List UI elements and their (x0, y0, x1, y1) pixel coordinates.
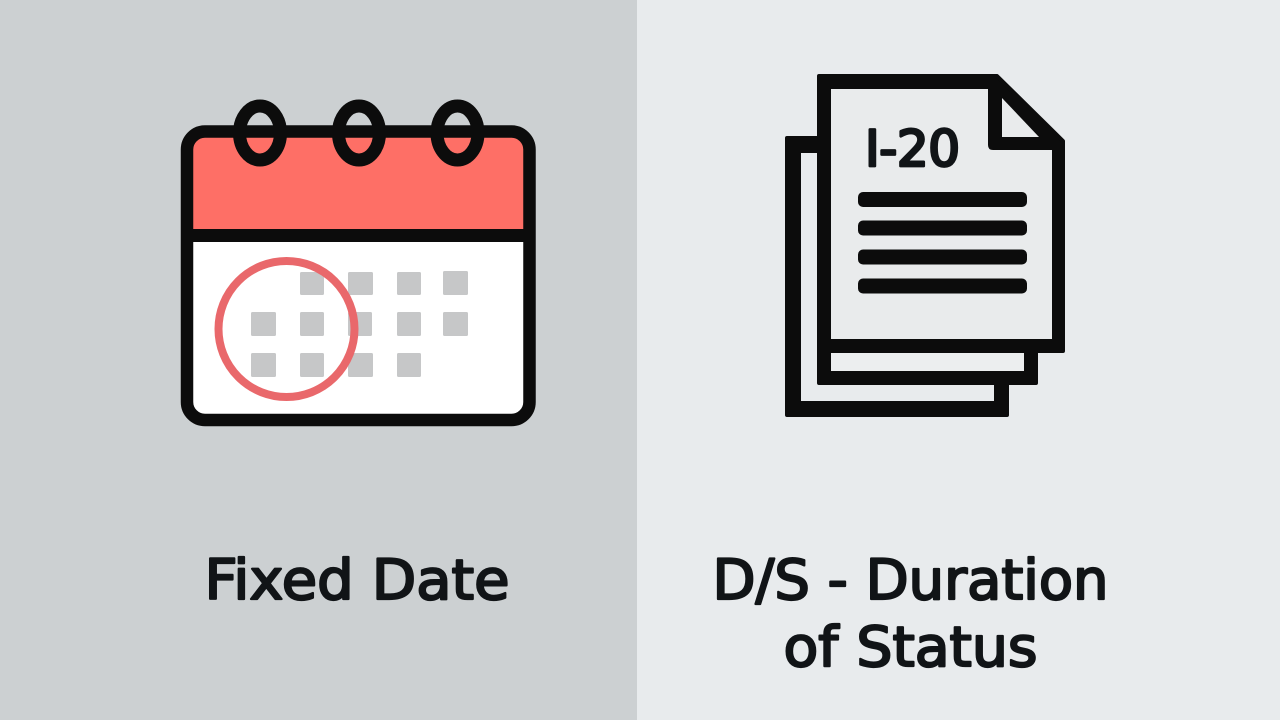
heading: D/S - Duration of Status: D/S - Duration (712, 548, 1108, 612)
heading: fixed date: Fixed Date (204, 548, 510, 612)
front sheet (819, 76, 1063, 351)
icon: I-20 document stack (787, 76, 1063, 415)
page fold (1002, 98, 1039, 137)
middle sheet (819, 340, 1036, 383)
icon: calendar (187, 106, 530, 420)
panel: fixed date (0, 0, 637, 720)
heading: D/S - Duration of Status (712, 548, 1108, 679)
back sheet (787, 138, 1007, 415)
document text lines (858, 192, 1027, 294)
panel: duration of status (637, 0, 1280, 720)
label: I-20: I-20 (865, 120, 960, 178)
middle sheet face (831, 353, 1024, 371)
heading: D/S - Duration of Status: of Status (784, 615, 1038, 679)
front sheet face (831, 89, 1052, 339)
